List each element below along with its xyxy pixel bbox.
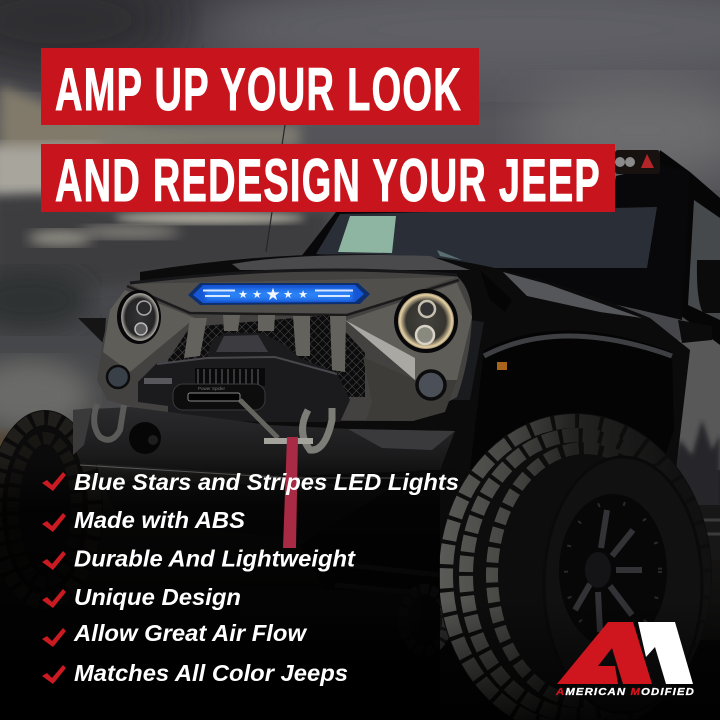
stars: ★ — [283, 288, 293, 301]
winch: Power Spider — [198, 386, 226, 391]
banner: amp up your look — [41, 48, 479, 125]
left lobe — [103, 290, 195, 372]
logo mark — [557, 622, 693, 684]
left mirror stub — [78, 318, 106, 344]
right lobe — [347, 283, 472, 380]
feature: unique design: Unique Design — [74, 584, 241, 610]
stars — [238, 285, 308, 305]
sidewall — [544, 457, 702, 713]
logo wordmark: AMERICAN MODIFIED — [555, 687, 695, 698]
red tow strap — [283, 437, 298, 548]
dark gradient behind the list — [0, 455, 440, 720]
side window and cab — [657, 150, 720, 345]
grille — [97, 270, 472, 421]
winch — [138, 333, 350, 422]
logo: American Modified — [555, 622, 695, 698]
windshield header and light bar — [300, 150, 690, 320]
feature: durable and lightweight: Durable And Lightweight — [74, 546, 356, 572]
shackles and cable — [94, 400, 332, 450]
stars: ★ — [252, 288, 262, 301]
mesh openings — [168, 315, 365, 397]
wheel well and fender flare — [452, 320, 674, 470]
icon: side mirror — [678, 260, 720, 343]
feature list — [42, 469, 459, 686]
bumper — [73, 407, 455, 545]
stars: ★ — [265, 285, 281, 305]
grille slats — [184, 315, 346, 372]
hood and body — [140, 254, 690, 520]
chassis and rear tyre — [240, 470, 460, 656]
banner: amp up your look: AMP UP YOUR LOOK — [55, 56, 462, 123]
blue LED light bar — [188, 283, 370, 305]
rim — [559, 494, 667, 648]
tread blocks — [446, 421, 704, 720]
jeep — [0, 150, 720, 610]
feature: blue stars and stripes: Blue Stars and Stripes LED Lights — [74, 469, 459, 495]
antenna — [266, 125, 285, 252]
feature: made with abs: Made with ABS — [74, 507, 245, 533]
feature: great air flow: Allow Great Air Flow — [73, 620, 308, 646]
stars: ★ — [238, 288, 248, 301]
icon: headlight left — [117, 290, 161, 344]
icon: headlight right — [394, 289, 458, 353]
stars: ★ — [298, 288, 308, 301]
wiper and bonnet latch — [480, 270, 512, 312]
bottom dark fade — [0, 600, 720, 720]
front tyre and wheel — [438, 413, 712, 720]
feature: matches all colors: Matches All Color Jeeps — [74, 660, 348, 686]
left tyre — [0, 410, 103, 610]
icon: fog lights — [107, 366, 445, 399]
